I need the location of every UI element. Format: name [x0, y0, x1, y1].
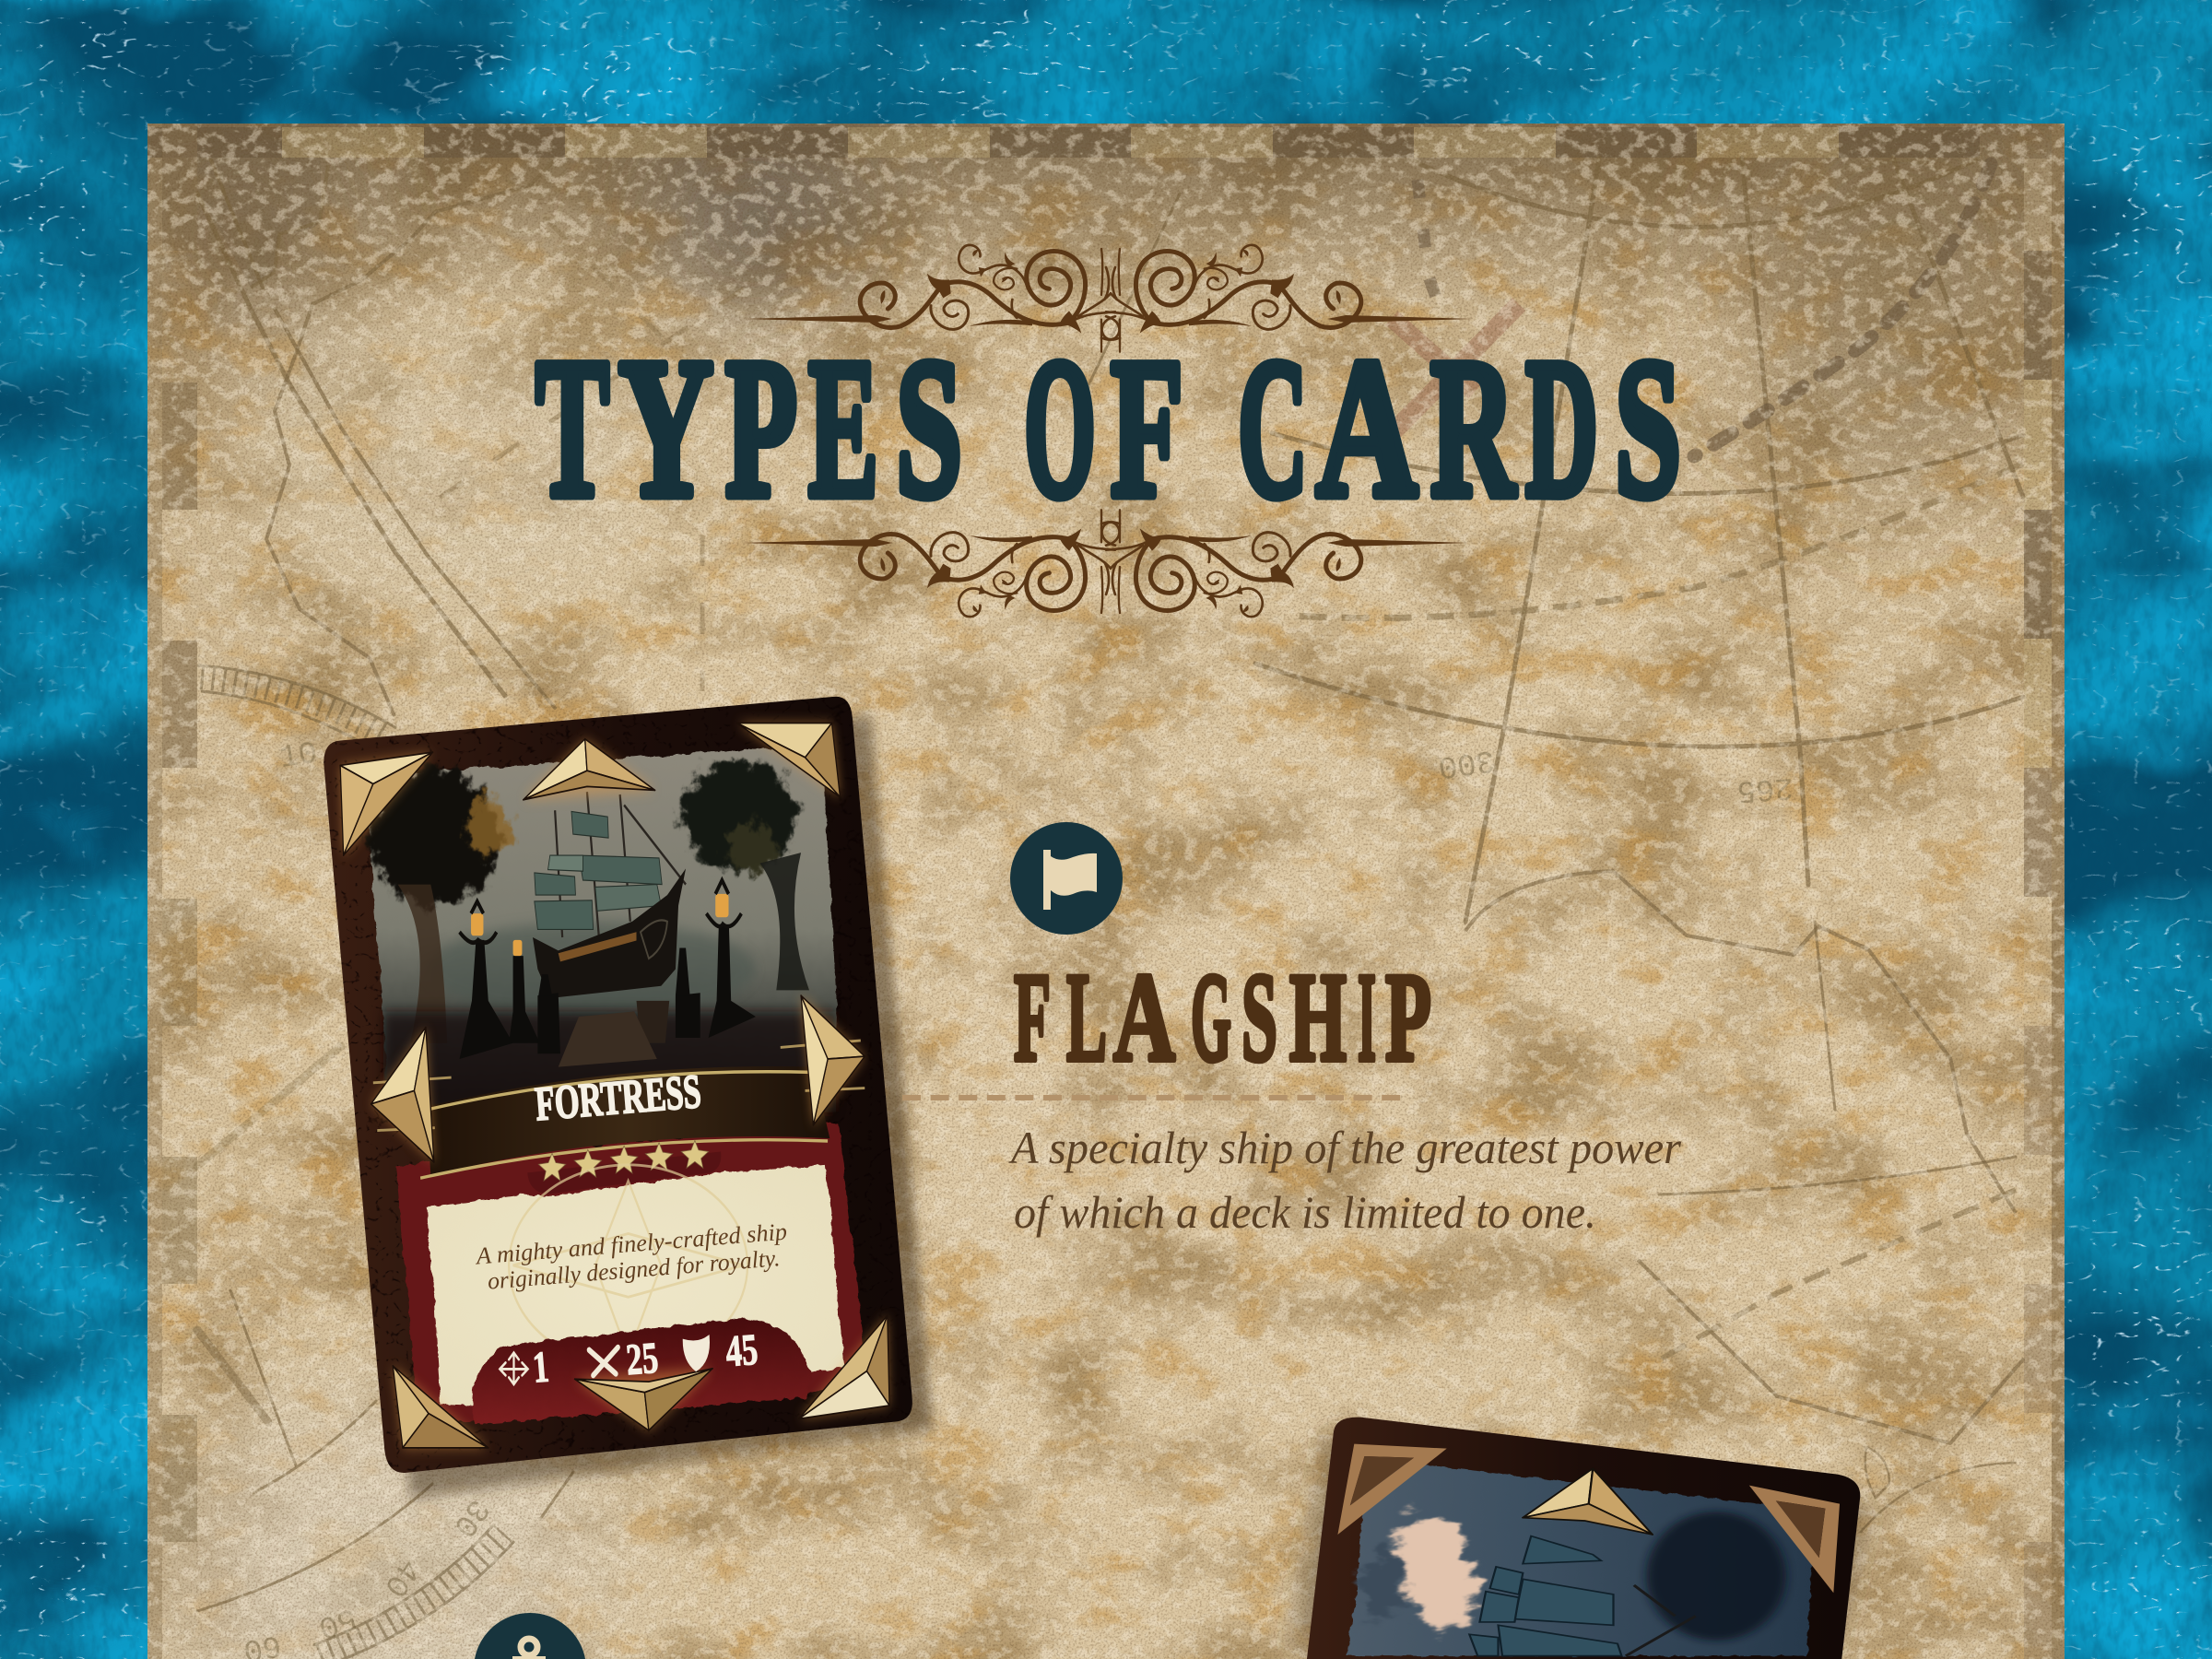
parchment text area [427, 1165, 844, 1406]
scene [366, 744, 837, 1112]
title: E [808, 318, 878, 538]
stars pill [527, 1140, 721, 1194]
land block top left [241, 196, 320, 286]
card shadow [1290, 1433, 1871, 1650]
card stats [531, 1325, 759, 1393]
ornament: top flourish [745, 245, 1473, 352]
card description: originally designed for royalty. [487, 1244, 781, 1295]
title: C [1238, 318, 1308, 538]
faded map numbers: 40 [376, 1552, 426, 1603]
title: P [725, 318, 797, 538]
card stats: 45 [724, 1325, 759, 1377]
card description [474, 1218, 790, 1296]
title: F [1111, 318, 1179, 538]
card shadow [345, 715, 933, 1498]
title: O [1024, 318, 1096, 538]
title: Y [618, 318, 713, 538]
storm ship sails [1469, 1536, 1621, 1656]
flagship description [1008, 1122, 1682, 1238]
stats bar [472, 1318, 811, 1424]
thick dashed route [1694, 164, 1991, 456]
flagship heading: I [1358, 947, 1376, 1088]
flagship description: A specialty ship of the greatest power [1008, 1122, 1682, 1173]
card: storm ship [1290, 1418, 1871, 1659]
flagship heading: P [1385, 947, 1431, 1088]
faded map numbers: 10 [277, 737, 320, 777]
faded map numbers [241, 737, 1794, 1659]
stat icons [500, 1336, 709, 1384]
flagship icon [1010, 822, 1123, 935]
ship masts [555, 792, 686, 943]
anchor icon [475, 1613, 585, 1659]
card artwork [1307, 1418, 1860, 1659]
lamps and bollards [460, 927, 756, 1059]
card description: A mighty and finely-crafted ship [474, 1218, 788, 1270]
ornament: bottom flourish [741, 510, 1469, 617]
flagship heading: G [1191, 947, 1231, 1088]
faded map numbers: 30 [445, 1492, 495, 1543]
map grid lines [197, 158, 2023, 1611]
gold corner studs [340, 724, 889, 1448]
faded map numbers: 265 [1735, 769, 1794, 807]
title: R [1430, 318, 1516, 538]
coastlines [251, 160, 2024, 1533]
thin dashed route [1290, 464, 2023, 618]
ship sails [535, 811, 662, 929]
wood corner left [1337, 1444, 1447, 1535]
scale ticks on the compass [197, 665, 514, 1659]
card stats: 25 [624, 1334, 660, 1385]
flagship heading: H [1289, 947, 1347, 1088]
title: T [535, 318, 609, 538]
flagship heading: L [1066, 947, 1107, 1088]
card: Fortress [320, 694, 933, 1498]
dashed divider [902, 1095, 1405, 1100]
title: S [896, 318, 962, 538]
title: D [1525, 318, 1598, 538]
ship hull [533, 868, 686, 998]
red X mark [1382, 304, 1519, 442]
gold top stud [1523, 1468, 1653, 1535]
card stats: 1 [531, 1343, 551, 1393]
flagship heading: A [1113, 947, 1175, 1088]
red text frame [395, 1123, 869, 1424]
title banner [373, 1041, 865, 1178]
storm clouds [1362, 1510, 1786, 1641]
faded map numbers: 50 [313, 1599, 360, 1644]
flagship description: of which a deck is limited to one. [1014, 1186, 1596, 1238]
faded map numbers: 300 [1436, 741, 1497, 783]
card title: FORTRESS [534, 1065, 703, 1131]
title: A [1316, 318, 1418, 538]
wood corner right [1749, 1486, 1840, 1593]
card artwork [320, 694, 916, 1477]
flagship heading: F [1014, 947, 1051, 1088]
aged darkening at the top [147, 124, 2065, 297]
flagship heading: S [1241, 947, 1277, 1088]
title: S [1615, 318, 1681, 538]
